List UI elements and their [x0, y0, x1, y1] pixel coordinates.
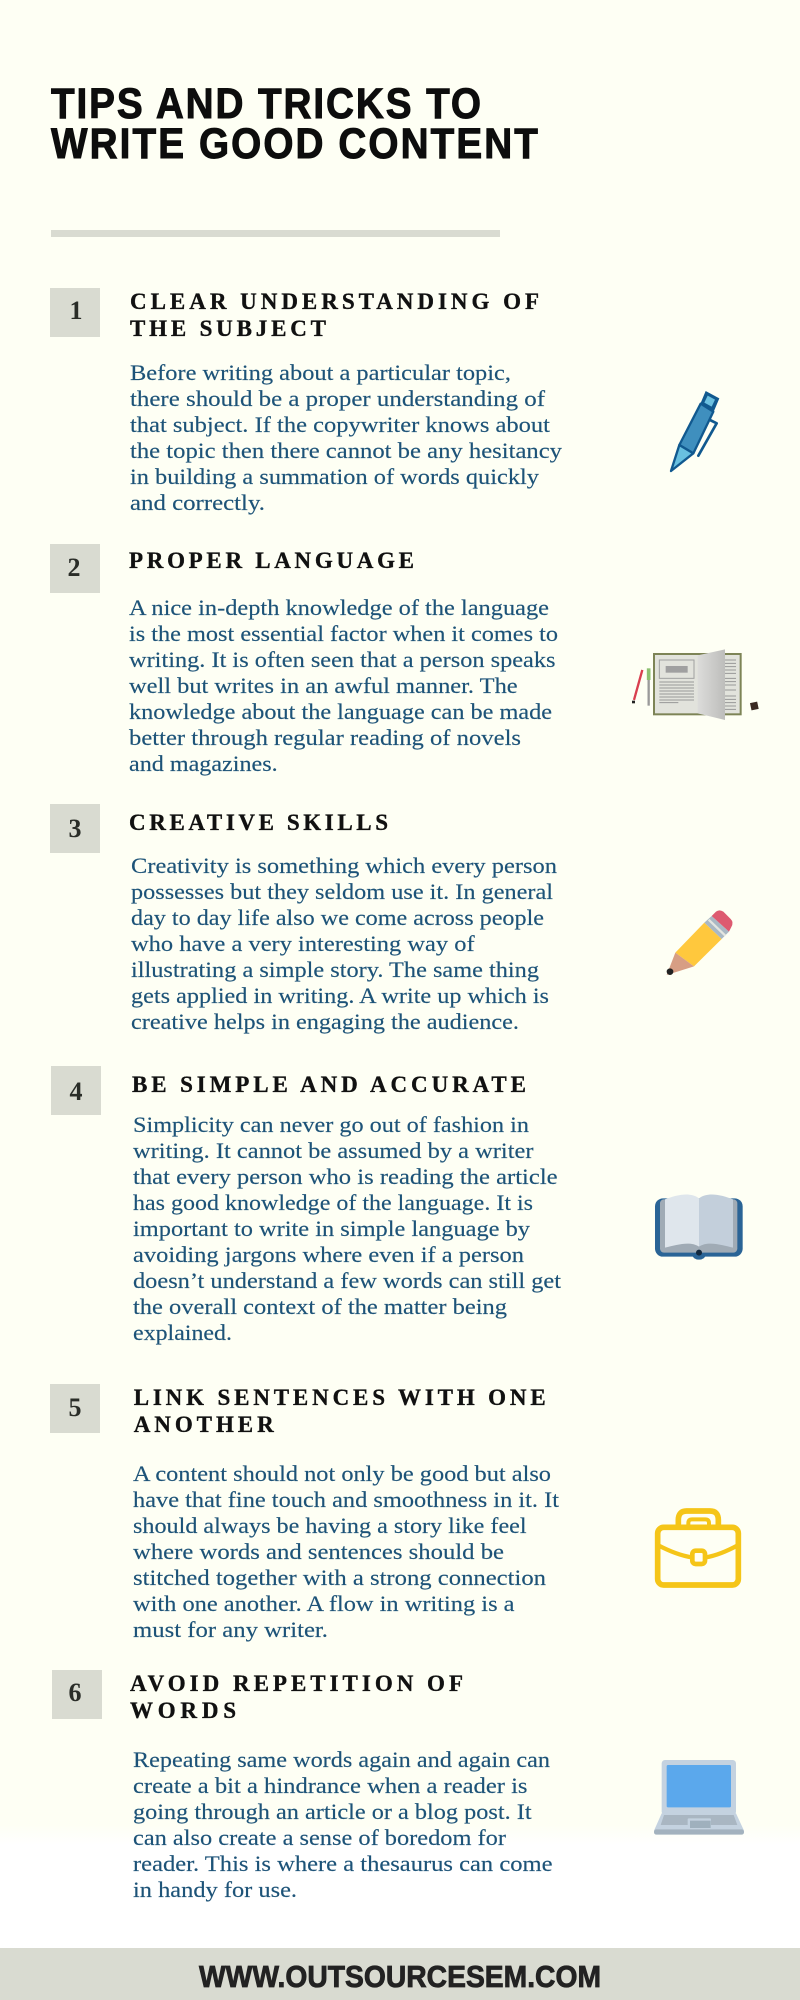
body text 6: Repeating same words again and again can: [133, 1747, 550, 1772]
body text 3: day to day life also we come across people: [131, 905, 544, 930]
footer bar: [0, 1948, 800, 2000]
body text 5: where words and sentences should be: [133, 1539, 504, 1564]
icon: laptop: [654, 1760, 744, 1835]
body text 2: better through regular reading of novels: [129, 725, 521, 750]
heading 5: ANOTHER: [134, 1412, 274, 1437]
number badge 6: [52, 1670, 102, 1719]
body text 3: Creativity is something which every person: [131, 853, 557, 878]
body text 1: the topic then there cannot be any hesitancy: [130, 438, 562, 463]
panel: tip 1: [50, 288, 719, 515]
icon: open book: [655, 1195, 743, 1260]
body text 2: writing. It is often seen that a person speaks: [129, 647, 556, 672]
body text 1: there should be a proper understanding of: [130, 386, 546, 411]
body text 1: [130, 360, 562, 515]
body text 5: A content should not only be good but also: [133, 1461, 551, 1486]
body text 4: important to write in simple language by: [133, 1216, 530, 1241]
heading 2: PROPER LANGUAGE: [129, 548, 414, 573]
body text 4: the overall context of the matter being: [133, 1294, 507, 1319]
body text 5: [133, 1461, 559, 1642]
body text 1: Before writing about a particular topic,: [130, 360, 511, 385]
body text 5: have that fine touch and smoothness in it. It: [133, 1487, 559, 1512]
body text 5: stitched together with a strong connection: [133, 1565, 546, 1590]
panel: tip 5: [50, 1384, 738, 1642]
body text 2: knowledge about the language can be made: [129, 699, 552, 724]
body text 6: can also create a sense of boredom for: [133, 1825, 507, 1850]
panel: tip 6: [52, 1670, 744, 1902]
body text 4: Simplicity can never go out of fashion in: [133, 1112, 529, 1137]
body text 1: and correctly.: [130, 490, 265, 515]
body text 6: going through an article or a blog post. It: [133, 1799, 532, 1824]
body text 2: [129, 595, 558, 776]
body text 3: [131, 853, 557, 1034]
body text 2: and magazines.: [129, 751, 278, 776]
body text 5: with one another. A flow in writing is a: [133, 1591, 515, 1616]
body text 5: must for any writer.: [133, 1617, 328, 1642]
heading 3: CREATIVE SKILLS: [129, 810, 388, 835]
panel: tip 4: [51, 1066, 743, 1345]
body text 6: create a bit a hindrance when a reader is: [133, 1773, 528, 1798]
number badge 5: 5: [68, 1393, 82, 1422]
heading 6: [130, 1671, 463, 1723]
body text 4: has good knowledge of the language. It is: [133, 1190, 533, 1215]
number badge 6: 6: [68, 1678, 82, 1707]
body text 4: [133, 1112, 561, 1345]
icon: pen: [671, 391, 719, 471]
heading 6: AVOID REPETITION OF: [130, 1671, 463, 1696]
icon: briefcase: [658, 1511, 738, 1585]
body text 4: explained.: [133, 1320, 232, 1345]
panel: tip 2: [50, 544, 759, 776]
body text 3: creative helps in engaging the audience.: [131, 1009, 519, 1034]
panel: tip 3: [50, 804, 733, 1034]
body text 6: reader. This is where a thesaurus can come: [133, 1851, 552, 1876]
number badge 1: [50, 288, 100, 337]
number badge 2: [50, 544, 100, 593]
body text 2: A nice in-depth knowledge of the language: [129, 595, 549, 620]
heading 5: LINK SENTENCES WITH ONE: [134, 1385, 546, 1410]
body text 4: doesn’t understand a few words can still get: [133, 1268, 561, 1293]
heading 1: [130, 289, 539, 341]
body text 3: who have a very interesting way of: [131, 931, 475, 956]
body text 3: illustrating a simple story. The same thing: [131, 957, 539, 982]
icon: pencil: [667, 910, 733, 975]
title: TIPS AND TRICKS TO: [51, 79, 481, 127]
body text 5: should always be having a story like feel: [133, 1513, 527, 1538]
number badge 4: 4: [70, 1077, 82, 1106]
heading 1: CLEAR UNDERSTANDING OF: [130, 289, 539, 314]
number badge 5: [50, 1384, 100, 1433]
heading 1: THE SUBJECT: [130, 316, 326, 341]
body text 3: gets applied in writing. A write up which is: [131, 983, 549, 1008]
body text 2: well but writes in an awful manner. The: [129, 673, 518, 698]
title: WRITE GOOD CONTENT: [51, 119, 538, 167]
body text 1: in building a summation of words quickly: [130, 464, 539, 489]
body text 6: [133, 1747, 552, 1902]
body text 6: in handy for use.: [133, 1877, 297, 1902]
number badge 2: 2: [68, 553, 80, 582]
number badge 3: 3: [68, 814, 82, 843]
number badge 1: 1: [70, 296, 82, 325]
body text 3: possesses but they seldom use it. In general: [131, 879, 553, 904]
heading 5: [134, 1385, 546, 1437]
heading 4: BE SIMPLE AND ACCURATE: [132, 1072, 526, 1097]
title: [51, 79, 538, 167]
footer bar: WWW.OUTSOURCESEM.COM: [199, 1959, 601, 1994]
number badge 3: [50, 804, 100, 853]
body text 4: writing. It cannot be assumed by a writer: [133, 1138, 534, 1163]
body text 4: avoiding jargons where even if a person: [133, 1242, 524, 1267]
body text 1: that subject. If the copywriter knows about: [130, 412, 550, 437]
heading 6: WORDS: [130, 1698, 236, 1723]
number badge 4: [51, 1066, 101, 1115]
icon: open notebook: [632, 649, 759, 720]
body text 4: that every person who is reading the article: [133, 1164, 558, 1189]
body text 2: is the most essential factor when it comes to: [129, 621, 558, 646]
